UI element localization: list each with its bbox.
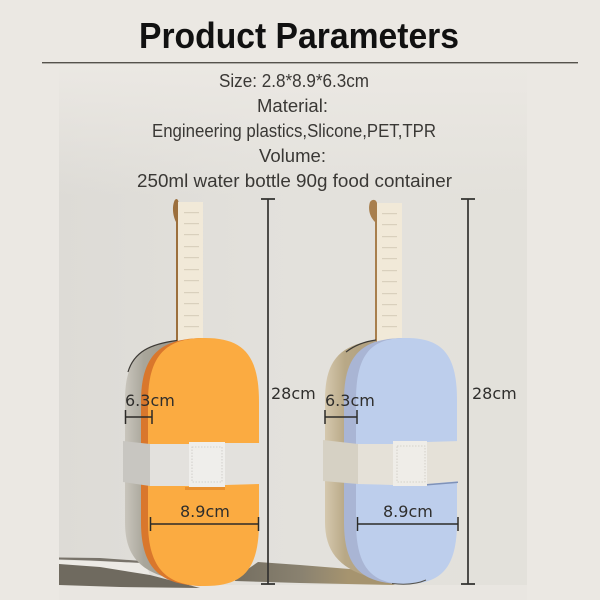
label: blue depth: 6.3cm [325, 391, 375, 410]
title divider [42, 62, 578, 63]
floor shadow band [59, 564, 200, 588]
front lid [356, 338, 457, 584]
dimension: orange depth [126, 410, 152, 424]
front lid [148, 338, 259, 586]
label: right height: 28cm [472, 384, 517, 403]
photo background [59, 66, 527, 600]
specification text [137, 71, 452, 191]
floor surface [59, 585, 527, 600]
elastic band [323, 440, 460, 486]
label: orange depth: 6.3cm [125, 391, 175, 410]
title: Product Parameters [139, 15, 459, 56]
label: left height: 28cm [271, 384, 316, 403]
lid bottom edge [392, 580, 426, 584]
volume detail: 250ml water bottle 90g food container [137, 171, 452, 191]
label: orange width: 8.9cm [180, 502, 230, 521]
material list: Engineering plastics,Slicone,PET,TPR [152, 121, 436, 141]
dimension: orange width [150, 517, 258, 531]
label: blue width: 8.9cm [383, 502, 433, 521]
elastic band [123, 441, 260, 490]
floor shadow streak [59, 558, 142, 563]
blue lunch box [323, 200, 460, 584]
side lid [344, 338, 405, 584]
dimension: left height 28cm [261, 199, 275, 584]
floor shadow right [235, 562, 395, 585]
back shell [125, 341, 200, 580]
dimension: blue depth [325, 410, 357, 424]
back shell [325, 340, 390, 580]
side lid [141, 338, 205, 586]
size line: Size: 2.8*8.9*6.3cm [219, 71, 369, 91]
floor highlight [59, 560, 150, 575]
orange lunch box [123, 199, 260, 586]
dimension: right height 28cm [461, 199, 475, 584]
dimension: blue width [358, 517, 458, 531]
strap [173, 199, 203, 342]
material label: Material: [257, 96, 328, 116]
volume label: Volume: [259, 146, 326, 166]
strap [369, 200, 402, 343]
